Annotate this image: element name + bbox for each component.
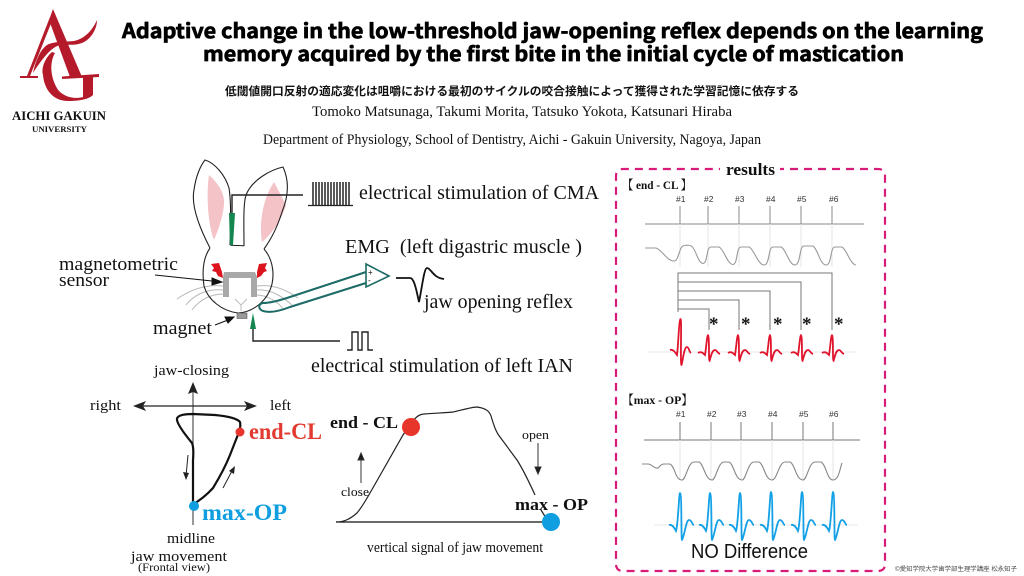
IAN electrode and stimulation [250,313,373,350]
signal curve [336,407,546,522]
red EMG traces [670,319,844,365]
rabbit outline [193,160,287,313]
stimulus numbers [676,194,839,204]
guide lines [680,224,832,267]
label: midline: midline [167,531,215,547]
label: max - OP: max - OP [515,495,588,514]
arrow: magnet [215,317,234,325]
label: jaw opening reflex: jaw opening reflex [423,291,573,313]
stimulus numbers: #4 [768,409,778,419]
label: magnetometric sensor [59,254,178,291]
label: end - CL: end - CL [330,413,398,432]
label: left: left [270,398,292,414]
label: max-OP: max-OP [202,500,287,525]
comparison brackets [678,273,832,330]
stimulus numbers: #5 [799,409,809,419]
label: jaw movement: jaw movement [130,549,228,565]
arrow: close [358,453,364,483]
jaw movement frontal diagram [90,363,322,574]
axes [133,382,257,525]
stimulus numbers: #1 [676,409,686,419]
stimulus numbers: #5 [797,194,807,204]
label: close: close [341,484,369,499]
stimulus numbers: #2 [704,194,714,204]
stimulus numbers: #6 [829,409,839,419]
red dot end-CL [402,418,420,436]
no difference label: NO Difference [691,540,808,563]
left ear pink [208,175,224,240]
direction arrows [183,455,235,488]
vertical signal diagram [330,407,588,556]
right ear pink [261,182,286,242]
amplifier and leads [259,264,389,312]
rabbit experiment diagram [59,160,600,377]
label: magnetometric sensor: magnetometric [59,254,178,275]
significance stars: * [802,314,812,335]
stimulus numbers: #4 [766,194,776,204]
heading mask and results heading: results [726,160,775,179]
magnet [237,313,247,318]
label: magnet: magnet [153,318,213,339]
dashed frame [616,169,885,571]
stimulus ticks [645,206,864,224]
label: right: right [90,398,122,414]
significance stars: * [773,314,782,335]
red eyes [211,263,267,278]
mouth [235,299,247,311]
significance stars: * [834,314,844,335]
arrow: sensor [155,275,222,285]
label: jaw-closing: jaw-closing [153,363,230,379]
label: open: open [522,427,550,442]
stimulus numbers: #3 [737,409,747,419]
stimulus numbers [676,409,839,419]
EMG baseline [654,524,858,526]
label: stimulation of CMA: electrical stimulation of CMA [359,182,600,204]
title [121,15,983,67]
significance stars: * [709,314,718,335]
guide lines [680,440,833,480]
baseline [336,521,550,523]
stimulus numbers: #6 [829,194,839,204]
jaw path loop [177,414,240,505]
label: stimulation of left IAN: electrical stimulation of left IAN [311,355,573,377]
significance stars: * [741,314,750,335]
authors: Tomoko Matsunaga, Takumi Morita, Tatsuko Yokota, Katsunari Hiraba [312,104,733,120]
sub-panel: end-CL [622,178,864,365]
icon: rabbit [177,160,298,318]
label: frontal view: (Frontal view) [138,560,210,574]
label: magnetometric sensor: sensor [59,270,110,291]
logo: Aichi Gakuin University [12,9,107,134]
red dot [236,428,244,436]
title: Adaptive change in the low-threshold jaw-opening reflex depends on the learning [121,15,983,44]
whiskers [177,286,298,310]
arrow: open [535,443,541,474]
stimulus numbers: #1 [676,194,686,204]
affiliation: Department of Physiology, School of Dentistry, Aichi - Gakuin University, Nagoya, Japan [263,132,762,148]
stimulus numbers: #2 [707,409,717,419]
jaw signal trace [642,462,842,480]
jaw signal trace [645,245,856,265]
blue dot [189,501,199,511]
significance stars [709,314,844,335]
blue dot max-OP [542,513,560,531]
blue EMG traces [669,492,847,540]
stimulus ticks [644,422,860,440]
label: EMG: EMG (left digastric muscle ) [345,236,582,258]
label: 【max - OP】 [622,393,693,407]
label: 【 end - CL 】 [622,178,692,192]
EMG waveform [396,268,444,302]
amplifier and leads: + [368,268,373,277]
japanese subtitle: 低閾値開口反射の適応変化は咀嚼における最初のサイクルの咬合接触によって獲得された学習記憶に依存する [225,84,799,98]
sub-panel: max-OP [622,393,860,563]
university name: AICHI GAKUIN [12,108,107,123]
university subtitle: UNIVERSITY [32,124,87,134]
caption: vertical signal of jaw movement [367,540,543,556]
CMA electrode and stimulation [229,182,353,245]
label: end-CL: end-CL [249,419,322,444]
amplifier and leads: - [368,276,371,285]
copyright: ©愛知学院大学歯学部生理学講座 松永知子 [895,565,1017,573]
title: memory acquired by the first bite in the initial cycle of mastication [203,38,904,67]
panel: results [616,160,885,571]
EMG baseline [648,351,856,353]
magnetometric sensor [223,272,257,297]
stimulus numbers: #3 [735,194,745,204]
icon: AG monogram [20,9,99,101]
